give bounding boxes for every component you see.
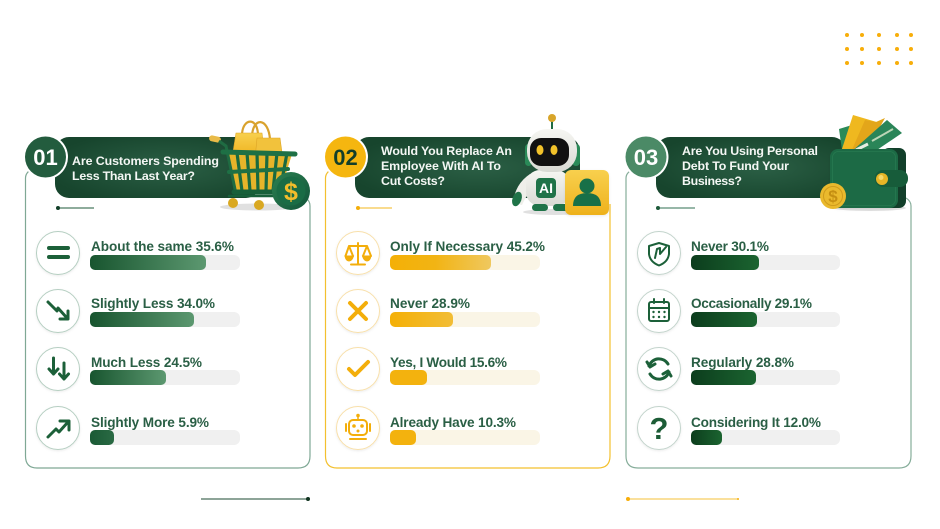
label: Considering It 12.0% xyxy=(691,415,821,430)
bar xyxy=(390,255,540,270)
panel 2 border xyxy=(326,171,610,468)
decorative dot grid xyxy=(845,33,913,65)
panel 2 number badge xyxy=(323,134,368,180)
label: Occasionally 29.1% xyxy=(691,296,812,311)
panel 2: replace employee with AI xyxy=(323,114,610,468)
icon: balance scales xyxy=(336,232,380,274)
icon: cross xyxy=(336,290,380,332)
icon: AI robot with person card: AI xyxy=(539,180,553,196)
label: Never 30.1% xyxy=(691,239,769,254)
panel 3 border xyxy=(626,171,911,468)
icon: wallet with cards and coin: $ xyxy=(828,187,838,206)
label: Already Have 10.3% xyxy=(390,415,516,430)
label: Regularly 28.8% xyxy=(691,355,794,370)
panel 2 header bar xyxy=(355,137,580,198)
panel 1: customer spending xyxy=(23,122,310,468)
icon: zigzag up arrow xyxy=(36,406,80,450)
panel 3 number badge xyxy=(624,134,668,180)
icon: shopping cart with coin: $ xyxy=(284,178,298,206)
panel 3 accent line xyxy=(656,206,695,210)
icon: shield xyxy=(638,232,680,274)
label: Slightly More 5.9% xyxy=(91,415,209,430)
label: Only If Necessary 45.2% xyxy=(390,239,545,254)
label: Never 28.9% xyxy=(390,296,470,311)
bar xyxy=(390,430,540,445)
bar xyxy=(90,430,240,445)
panel 3 heading: Are You Using Personal xyxy=(682,144,818,158)
panel 1 number badge xyxy=(23,134,68,180)
panel 2 heading: Employee With AI To xyxy=(381,159,501,173)
label: Yes, I Would 15.6% xyxy=(390,355,507,370)
panel 1 header bar xyxy=(55,137,260,198)
icon: calendar xyxy=(638,290,680,332)
icon: zigzag down arrow xyxy=(36,290,80,332)
icon: question mark xyxy=(638,406,680,450)
bar xyxy=(691,430,840,445)
row: never xyxy=(638,232,840,274)
panel 1 accent line xyxy=(56,206,94,210)
bar xyxy=(390,312,540,327)
bar xyxy=(90,312,240,327)
icon: check mark xyxy=(336,348,380,390)
row: slightly less xyxy=(36,290,240,332)
bottom orange connector line xyxy=(626,497,739,501)
panel 2 heading: Cut Costs? xyxy=(381,174,445,188)
panel 2 heading xyxy=(381,144,512,188)
panel 1 number badge: 01 xyxy=(33,145,58,170)
label: About the same 35.6% xyxy=(91,239,234,254)
panel 3: personal debt xyxy=(624,115,911,468)
icon: shopping cart with coin xyxy=(209,122,310,210)
panel 1 heading: Are Customers Spending xyxy=(72,154,219,168)
panel 1 heading xyxy=(72,154,219,183)
panel 3 number badge: 03 xyxy=(634,145,658,170)
row: already have xyxy=(336,406,540,450)
panel 3 heading: Debt To Fund Your xyxy=(682,159,789,173)
icon: AI robot with person card xyxy=(510,114,609,215)
bar xyxy=(691,370,840,385)
icon: question mark: ? xyxy=(650,411,668,446)
row: yes I would xyxy=(336,348,540,390)
panel 2 heading: Would You Replace An xyxy=(381,144,512,158)
row: slightly more xyxy=(36,406,240,450)
label: Much Less 24.5% xyxy=(91,355,202,370)
icon: two down arrows xyxy=(36,348,80,390)
label: Slightly Less 34.0% xyxy=(91,296,215,311)
row: regularly xyxy=(638,348,840,390)
row: occasionally xyxy=(638,290,840,332)
panel 3 heading xyxy=(682,144,818,188)
bar xyxy=(90,370,240,385)
icon: robot head xyxy=(336,406,380,450)
panel 3 heading: Business? xyxy=(682,174,742,188)
bar xyxy=(691,255,840,270)
bar xyxy=(390,370,540,385)
panel 2 accent line xyxy=(356,206,392,210)
row: considering it xyxy=(638,406,840,450)
panel 3 header bar xyxy=(656,137,846,198)
row: much less xyxy=(36,348,240,390)
row: about the same xyxy=(36,232,240,274)
panel 1 heading: Less Than Last Year? xyxy=(72,169,195,183)
bar xyxy=(90,255,240,270)
bottom dark connector line xyxy=(201,497,310,501)
panel 1 border xyxy=(26,171,310,468)
row: only if necessary xyxy=(336,232,545,274)
panel 2 number badge: 02 xyxy=(333,145,358,170)
icon: wallet with cards and coin xyxy=(820,115,908,211)
row: never xyxy=(336,290,540,332)
icon: refresh arrows xyxy=(638,348,680,390)
bar xyxy=(691,312,840,327)
icon: equals xyxy=(36,232,80,274)
